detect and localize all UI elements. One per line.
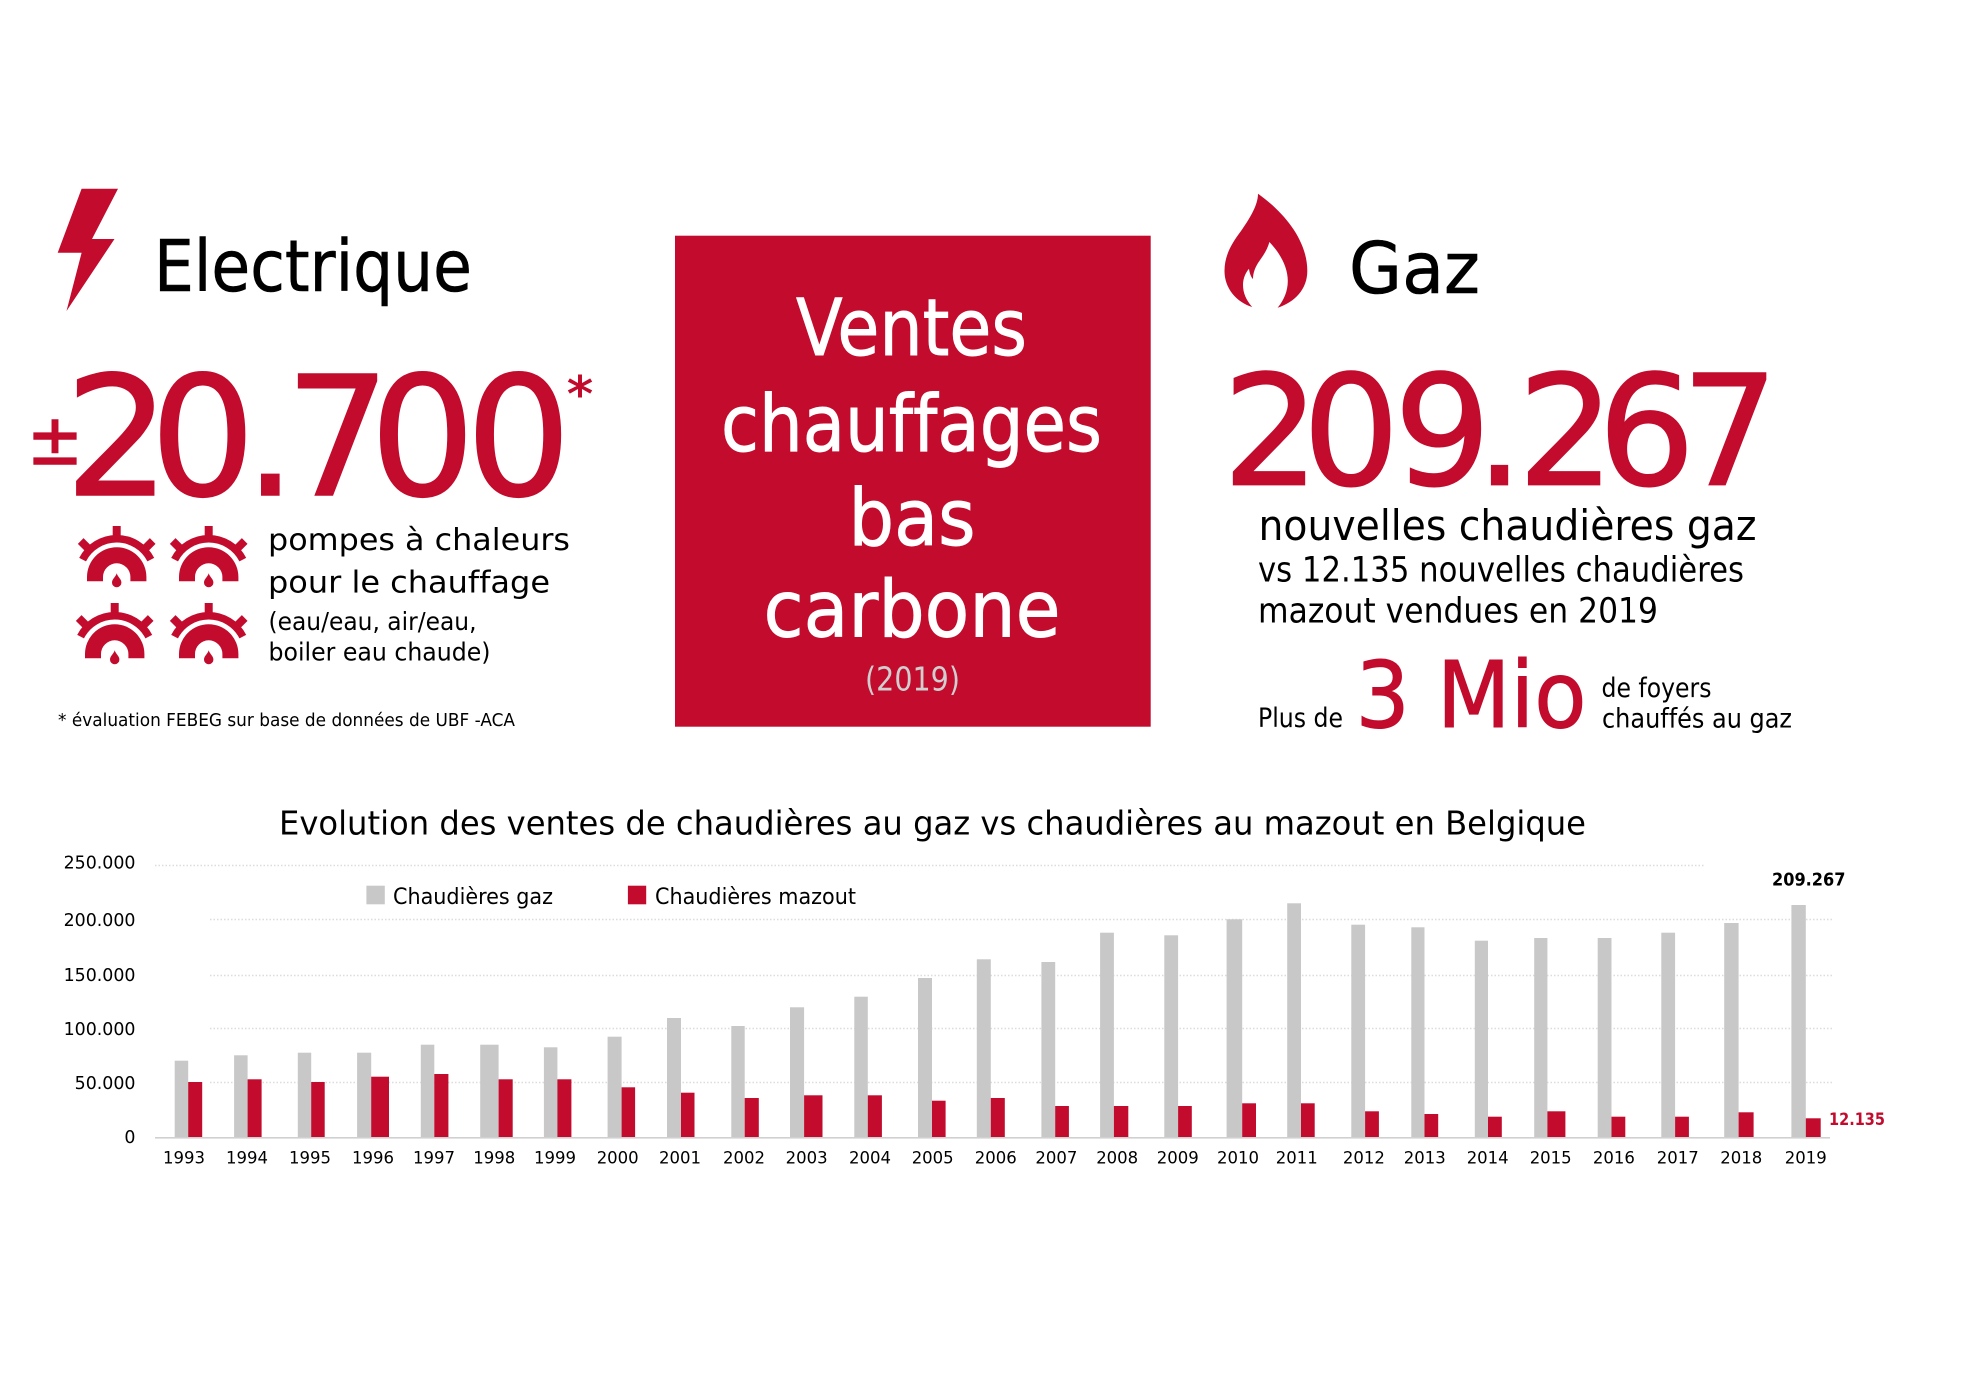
text: pour le chauffage: pour le chauffage bbox=[268, 566, 550, 600]
year labels: 2018 bbox=[1720, 1148, 1762, 1167]
year labels: 2017 bbox=[1657, 1148, 1699, 1167]
y axis labels bbox=[64, 854, 136, 1148]
footnote: * évaluation FEBEG sur base de données de UBF -ACA bbox=[58, 710, 516, 731]
text: de foyers: de foyers bbox=[1602, 673, 1712, 704]
title line: bas: bas bbox=[848, 474, 976, 564]
year: 2019: (2019) bbox=[865, 660, 960, 699]
gas bars bbox=[175, 903, 1806, 1138]
year labels: 2008 bbox=[1096, 1148, 1138, 1167]
year labels: 2019 bbox=[1785, 1148, 1827, 1167]
heading: Gaz: Gaz bbox=[1349, 227, 1480, 310]
asterisk: * bbox=[567, 367, 593, 423]
text: plus de: Plus de bbox=[1258, 703, 1343, 734]
year labels: 2001 bbox=[659, 1148, 701, 1167]
year labels: 1999 bbox=[534, 1148, 576, 1167]
year labels: 2016 bbox=[1593, 1148, 1635, 1167]
text: eau/eau, air/eau: (eau/eau, air/eau, bbox=[268, 607, 476, 636]
y axis labels: 0 bbox=[124, 1128, 136, 1148]
year labels: 2014 bbox=[1467, 1148, 1509, 1167]
text: mazout vendues: mazout vendues en 2019 bbox=[1258, 592, 1658, 632]
year labels: 2000 bbox=[597, 1148, 639, 1167]
year labels: 2011 bbox=[1276, 1148, 1318, 1167]
legend bbox=[366, 885, 856, 910]
text: boiler eau chaude: boiler eau chaude) bbox=[268, 638, 490, 666]
y axis labels: 150.000 bbox=[64, 966, 136, 986]
text: pompes a chaleurs: pompes à chaleurs bbox=[268, 523, 570, 558]
chart title: Evolution des ventes de chaudières au gaz vs chaudières au mazout en Belgique bbox=[279, 803, 1586, 842]
x axis line bbox=[155, 1137, 1830, 1139]
data label: 12.135: 12.135 bbox=[1829, 1110, 1885, 1129]
year labels: 2005 bbox=[912, 1148, 954, 1167]
big number: 209.267: 209.267 bbox=[1222, 344, 1779, 522]
panel: gaz bbox=[1222, 194, 1792, 749]
year labels: 2015 bbox=[1530, 1148, 1572, 1167]
big number: 3 Mio: 3 Mio bbox=[1356, 642, 1586, 749]
year labels: 2010 bbox=[1217, 1148, 1259, 1167]
title line: Ventes: Ventes bbox=[796, 284, 1027, 374]
plus-minus sign: ± bbox=[27, 399, 83, 481]
text: vs 12.135: vs 12.135 nouvelles chaudières bbox=[1258, 550, 1744, 590]
year labels: 1995 bbox=[289, 1148, 331, 1167]
title line: chauffages: chauffages bbox=[721, 380, 1102, 470]
panel: electrique bbox=[27, 189, 593, 731]
icon: lightning bolt bbox=[58, 189, 118, 311]
text: nouvelles chaudieres gaz: nouvelles chaudières gaz bbox=[1258, 501, 1756, 550]
year labels: 2013 bbox=[1404, 1148, 1446, 1167]
heading: Electrique: Electrique bbox=[154, 225, 472, 308]
title line: carbone: carbone bbox=[764, 566, 1060, 656]
year labels: 2002 bbox=[723, 1148, 765, 1167]
year labels bbox=[163, 1148, 1827, 1167]
year labels: 1994 bbox=[226, 1148, 268, 1167]
big number: 20.700: 20.700 bbox=[65, 342, 571, 535]
legend: Chaudières mazout bbox=[655, 885, 856, 910]
y axis labels: 200.000 bbox=[64, 911, 136, 931]
year labels: 1998 bbox=[473, 1148, 515, 1167]
y axis labels: 100.000 bbox=[64, 1020, 136, 1040]
panel: central title bbox=[675, 236, 1151, 727]
oil bars bbox=[188, 1074, 1821, 1138]
legend: Chaudières gaz bbox=[393, 885, 553, 910]
text: chauffes au gaz: chauffés au gaz bbox=[1602, 704, 1792, 734]
year labels: 2004 bbox=[849, 1148, 891, 1167]
y axis labels: 250.000 bbox=[64, 854, 136, 874]
year labels: 2012 bbox=[1343, 1148, 1385, 1167]
year labels: 2003 bbox=[786, 1148, 828, 1167]
year labels: 2007 bbox=[1035, 1148, 1077, 1167]
y axis labels: 50.000 bbox=[75, 1074, 136, 1094]
bar chart bbox=[64, 854, 1885, 1167]
year labels: 1997 bbox=[413, 1148, 455, 1167]
year labels: 1996 bbox=[352, 1148, 394, 1167]
icon: flame bbox=[1224, 194, 1307, 308]
icon group: heat pumps bbox=[79, 526, 245, 664]
year labels: 2006 bbox=[975, 1148, 1017, 1167]
data label: 209.267: 209.267 bbox=[1772, 871, 1846, 891]
year labels: 2009 bbox=[1157, 1148, 1199, 1167]
year labels: 1993 bbox=[163, 1148, 205, 1167]
red square bbox=[675, 236, 1151, 727]
